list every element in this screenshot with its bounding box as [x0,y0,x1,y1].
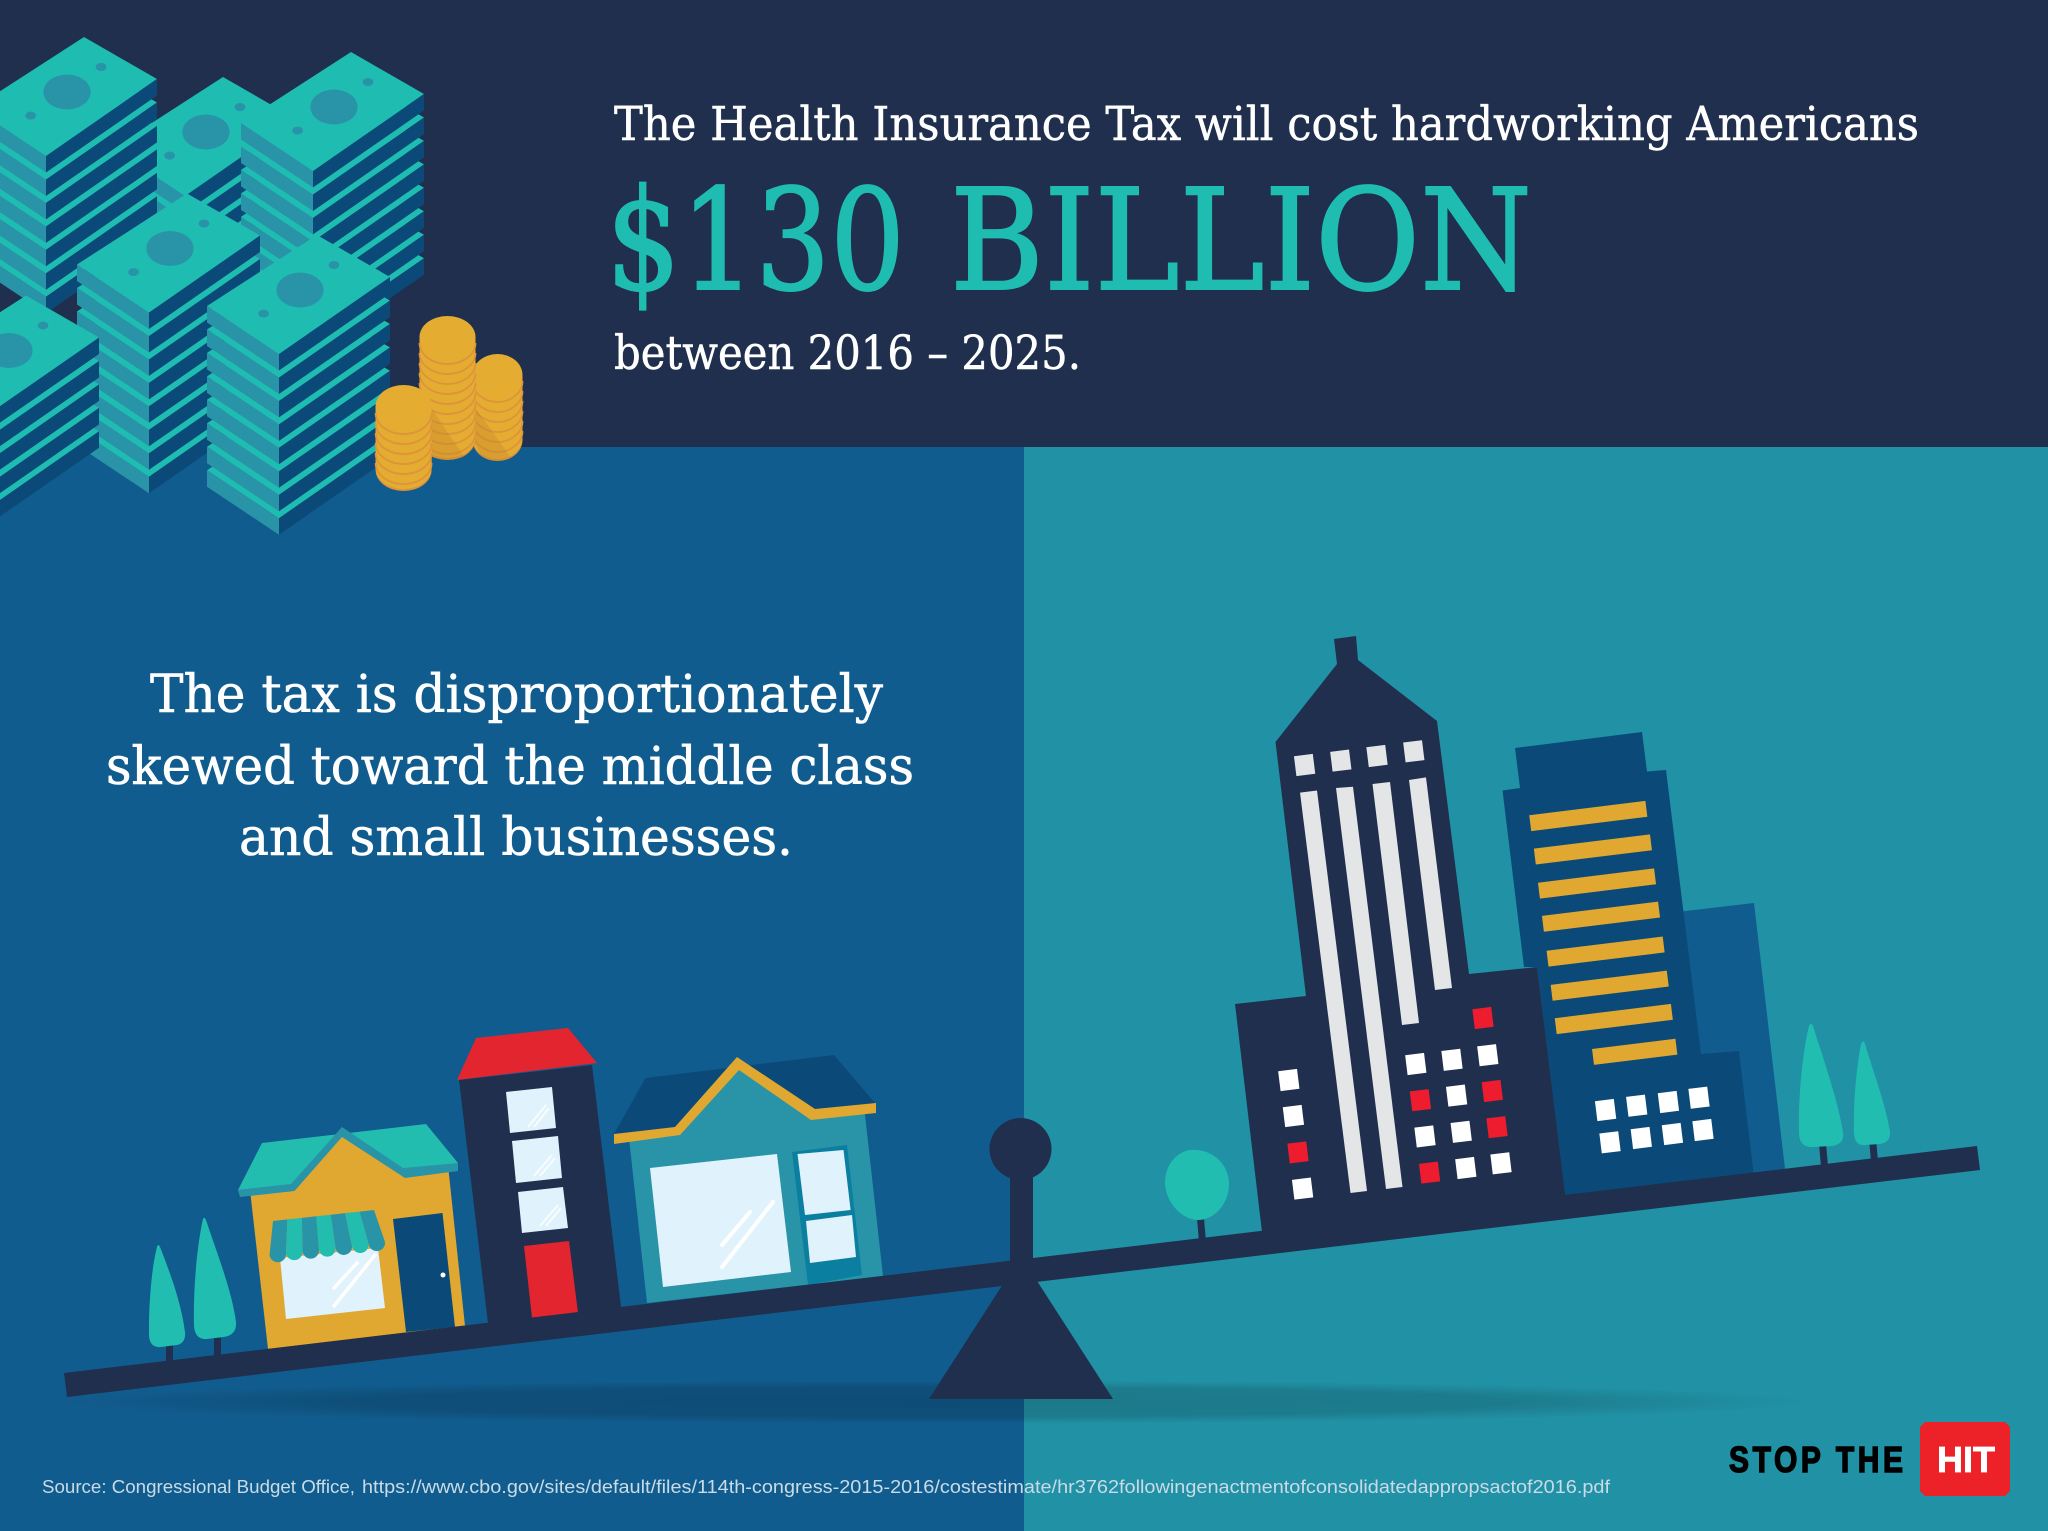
awning [270,1210,385,1262]
left side: small town [149,1028,883,1363]
back building [1660,903,1785,1180]
seesaw beam [64,1146,1980,1397]
shop building [238,1124,465,1349]
seesaw post and ball [990,1118,1052,1275]
ground shadow [50,1380,1810,1424]
stack F [0,296,99,525]
logo: stop the hit: STOP THE [1729,1440,1903,1481]
tree 4 [1854,1042,1890,1160]
coin stack left [376,385,432,491]
teal house [614,1055,883,1303]
heading: $130 billion [606,160,1532,323]
stack E [207,235,390,535]
right side: big city [1165,636,1890,1245]
coin stack right [472,354,522,461]
heading: $130 billion: BILLION [950,160,1532,323]
heading: $130 billion: $130 [606,160,905,323]
heading: intro line: The Health Insurance Tax will cost hardworking Americans [614,97,1919,152]
stack D [77,194,260,493]
icon: money stacks [0,37,424,535]
tree 3 [1799,1024,1843,1165]
text block: disproportion statement: The tax is disproportionately [150,665,884,725]
source citation: https://www.cbo.gov/sites/default/files/114th-congress-2015-2016/costestimate/hr3762followingenactmentofconsolidatedappropsactof2016.pdf [362,1476,1611,1497]
narrow tower with red roof [457,1028,621,1340]
text block: disproportion statement: skewed toward the middle class [106,737,914,797]
heading: date range: between 2016 – 2025. [614,326,1081,381]
tree 1 [149,1245,185,1363]
logo: stop the hit [1729,1422,2010,1496]
stack C [241,52,424,352]
panel: right teal background [1024,447,2048,1531]
logo: stop the hit: HIT [1937,1439,1995,1480]
coin stack middle [420,316,476,460]
stack A [0,37,157,313]
panel: left blue background [0,447,1024,1531]
round tree [1165,1150,1229,1242]
seesaw fulcrum triangle [929,1256,1113,1399]
source citation: Source: Congressional Budget Office, [42,1476,355,1497]
office building with gold windows [1502,732,1754,1197]
stack B [113,77,296,330]
main skyscraper [1235,636,1565,1245]
panel: header band [0,0,2048,447]
text block: disproportion statement [106,665,914,868]
text block: disproportion statement: and small businesses. [239,808,793,868]
tree 2 [194,1218,236,1355]
icon: gold coin stacks [376,316,522,491]
